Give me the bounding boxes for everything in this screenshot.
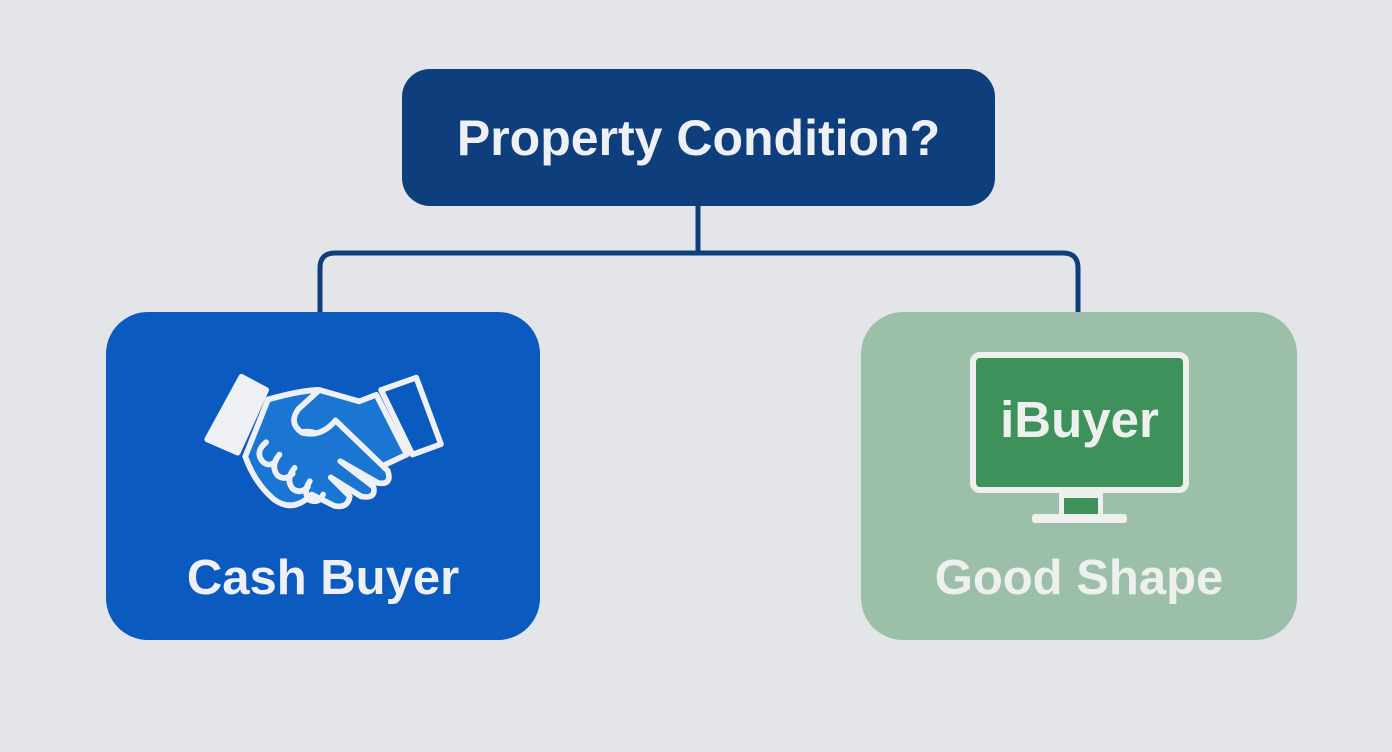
title box [402, 69, 995, 206]
icon: monitor with iBuyer: iBuyer [1000, 391, 1159, 448]
label: good shape: Good Shape [935, 551, 1223, 605]
title text: Property Condition? [457, 110, 940, 166]
icon: handshake [204, 374, 444, 510]
panel: good shape [861, 312, 1297, 640]
label: cash buyer: Cash Buyer [187, 551, 459, 605]
panel: cash buyer [106, 312, 540, 640]
icon: monitor with iBuyer [970, 352, 1189, 523]
